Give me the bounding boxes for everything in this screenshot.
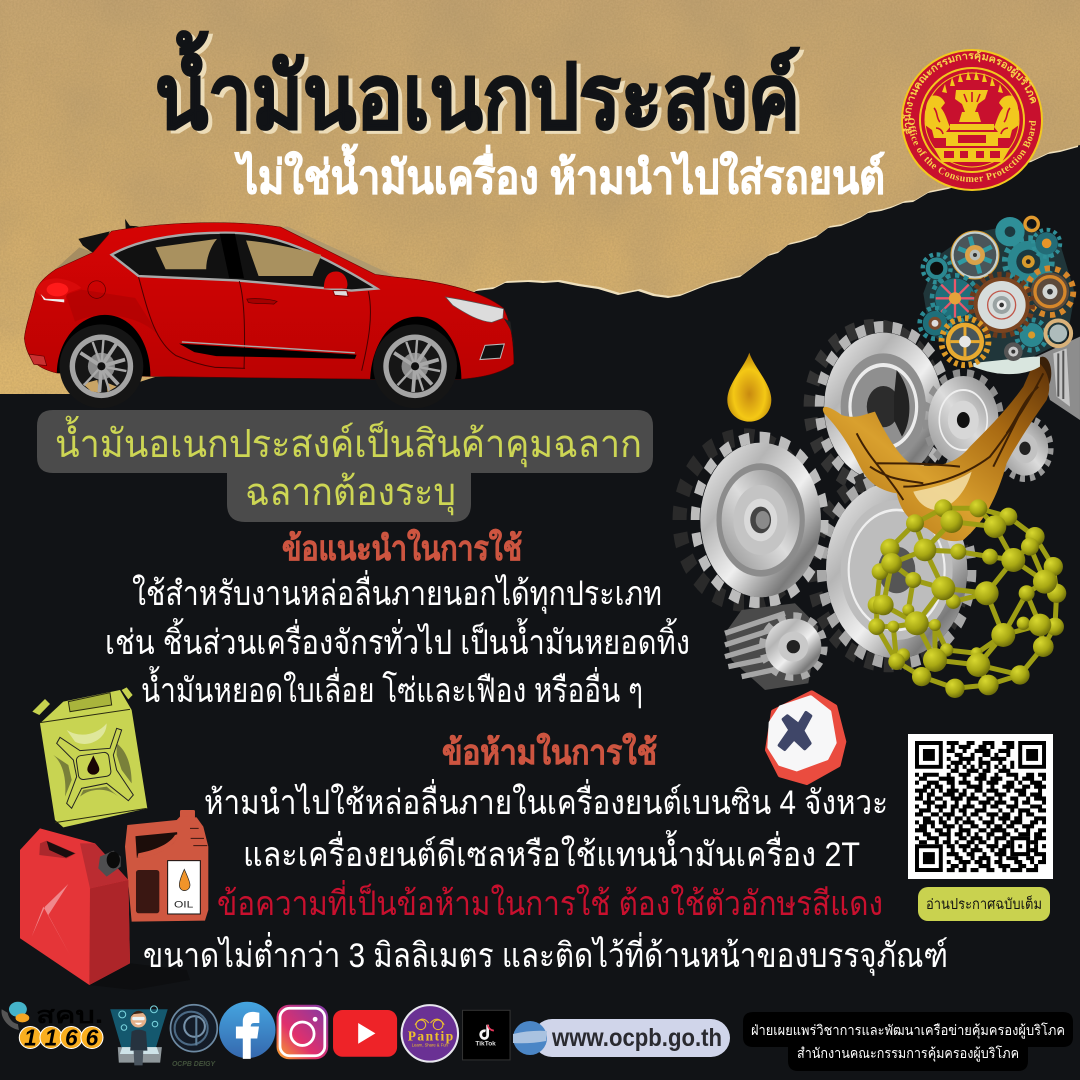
gear: small pinion bbox=[725, 603, 824, 690]
headlight bbox=[445, 297, 504, 322]
subtitle: ไม่ใช่น้ำมันเครื่อง ห้ามนำไปใส่รถยนต์ bbox=[234, 143, 885, 203]
label requirement text: น้ำมันอเนกประสงค์เป็นสินค้าคุมฉลาก bbox=[55, 415, 642, 468]
button: read full notice: อ่านประกาศฉบับเต็ม bbox=[926, 894, 1042, 913]
mirror bbox=[324, 271, 347, 289]
text block: usage advice: เช่น ชิ้นส่วนเครื่องจักรทั่วไป เป็นน้ำมันหยอดทิ้ง bbox=[105, 618, 690, 662]
wheel arches bbox=[57, 315, 150, 376]
footer logos bbox=[2, 1002, 510, 1068]
icon: oil drop bbox=[727, 353, 771, 422]
label requirement text bbox=[55, 415, 642, 516]
title: น้ำมันอเนกประสงค์ bbox=[159, 34, 804, 151]
icon: consumer protection board seal bbox=[901, 49, 1043, 191]
logo: hotline 1166: 1 bbox=[45, 1024, 57, 1050]
gear: upper large bbox=[810, 327, 947, 487]
gear: lower large bbox=[813, 476, 972, 664]
oil stream bbox=[823, 360, 1049, 541]
front wheel bbox=[373, 324, 457, 408]
heading: usage advice: ข้อแนะนำในการใช้ bbox=[282, 528, 522, 568]
tail light bbox=[35, 278, 81, 301]
gear: rear right small bbox=[1000, 419, 1050, 478]
text block: prohibited use: ขนาดไม่ต่ำกว่า 3 มิลลิเมตร และติดไว้ที่ด้านหน้าของบรรจุภัณฑ์ bbox=[143, 932, 948, 976]
side windows bbox=[112, 233, 377, 291]
text block: prohibited use: ห้ามนำไปใช้หล่อลื่นภายในเครื่องยนต์เบนซิน 4 จังหวะ bbox=[204, 779, 888, 822]
icon: orange oil bottle: OIL bbox=[174, 899, 193, 909]
logo: OCPB: OCPB DEIGY bbox=[172, 1061, 217, 1068]
logo: Pantip: Learn, Share & Fun bbox=[412, 1042, 449, 1047]
website pill bbox=[513, 1019, 730, 1057]
icon: TikTok: TikTok bbox=[475, 1040, 496, 1047]
logo: hotline 1166: 6 bbox=[86, 1024, 99, 1050]
text block: prohibited use: และเครื่องยนต์ดีเซลหรือใช้แทนน้ำมันเครื่อง 2T bbox=[243, 830, 860, 874]
logo: hotline 1166: 6 bbox=[65, 1024, 78, 1050]
text block: usage advice: ใช้สำหรับงานหล่อลื่นภายนอกได้ทุกประเภท bbox=[132, 570, 662, 614]
door lines bbox=[139, 277, 370, 371]
label box bbox=[37, 410, 653, 522]
icon: warning X bbox=[767, 693, 844, 783]
text block: usage advice: น้ำมันหยอดใบเลื่อย โซ่และเฟือง หรืออื่น ๆ bbox=[141, 666, 643, 710]
website pill: www.ocpb.go.th bbox=[551, 1024, 722, 1052]
button: read full notice bbox=[918, 887, 1050, 921]
footer credit: สำนักงานคณะกรรมการคุ้มครองผู้บริโภค bbox=[797, 1045, 1019, 1062]
logo: mascot bbox=[110, 1006, 168, 1065]
icon: green jerry can bbox=[32, 687, 147, 827]
gear: middle flat bbox=[926, 373, 1001, 467]
icon: consumer protection board seal: Office of the Consumer Protection Board bbox=[908, 118, 1036, 182]
rear wheel bbox=[59, 324, 143, 408]
logo: OCPB bbox=[170, 1005, 217, 1068]
text block: usage advice bbox=[105, 570, 690, 710]
icon: Instagram bbox=[277, 1005, 328, 1059]
torn kraft paper panel bbox=[0, 0, 1080, 394]
text block: prohibited use bbox=[143, 779, 948, 976]
label requirement text: ฉลากต้องระบุ bbox=[245, 471, 456, 516]
logo: hotline 1166: สคบ. bbox=[36, 1002, 103, 1028]
text block: prohibited use: ข้อความที่เป็นข้อห้ามในการใช้ ต้องใช้ตัวอักษรสีแดง bbox=[217, 880, 883, 923]
icon: Facebook bbox=[219, 1002, 276, 1059]
icon: consumer protection board seal: สำนักงานคณะกรรมการคุ้มครองผู้บริโภค bbox=[902, 50, 1036, 134]
gear: left large bbox=[680, 437, 824, 603]
logo: hotline 1166 bbox=[2, 1002, 103, 1050]
icon: YouTube bbox=[333, 1010, 397, 1057]
heading: prohibited use: ข้อห้ามในการใช้ bbox=[442, 732, 657, 772]
footer credit bbox=[743, 1012, 1073, 1071]
body bbox=[24, 223, 514, 379]
bottle bbox=[1037, 337, 1080, 420]
logo: hotline 1166: 1 bbox=[24, 1024, 37, 1050]
side strip bbox=[179, 344, 357, 359]
icon: orange oil bottle bbox=[125, 810, 208, 922]
molecule bbox=[868, 499, 1066, 698]
logo: Pantip bbox=[402, 1005, 458, 1062]
illustration: red car bbox=[24, 219, 514, 408]
logo: Pantip: Pantip bbox=[408, 1029, 453, 1044]
QR code bbox=[908, 734, 1053, 879]
icon: TikTok bbox=[463, 1010, 510, 1060]
illustration: gears, oil and molecule bbox=[680, 217, 1080, 698]
icon: red jerry can bbox=[20, 828, 190, 990]
title: น้ำมันอเนกประสงค์ bbox=[155, 31, 800, 148]
colourful gear cluster bbox=[920, 217, 1075, 374]
